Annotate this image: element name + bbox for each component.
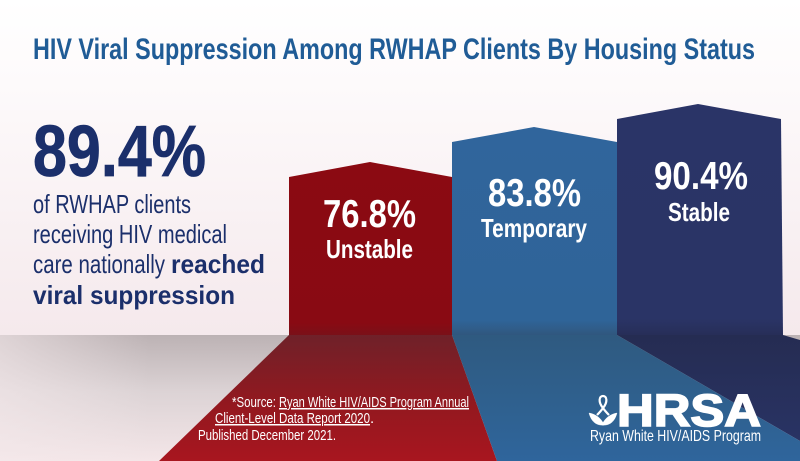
panel: unstable housing (159, 162, 497, 461)
source note: *Source: (232, 394, 276, 411)
description text (33, 189, 265, 310)
navy floor (617, 335, 800, 441)
red floor (159, 335, 497, 461)
floor (0, 335, 800, 461)
source note (198, 394, 469, 444)
blue floor (452, 335, 800, 461)
description text: care nationally (33, 249, 165, 279)
navy bar (617, 104, 783, 335)
description text: receiving HIV medical (33, 219, 227, 249)
blue bar (452, 127, 617, 335)
source note: Published December 2021. (198, 427, 336, 444)
temporary value: 83.8% (488, 172, 581, 215)
background (0, 0, 800, 335)
temporary label: Temporary (481, 213, 587, 243)
unstable value: 76.8% (323, 193, 416, 236)
source note: . (370, 410, 374, 427)
panel: stable housing (617, 104, 800, 441)
description text: viral suppression (33, 280, 235, 310)
HRSA wordmark: HRSA (617, 385, 761, 436)
stable label: Stable (668, 197, 730, 227)
source note: Client-Level Data Report 2020 (215, 410, 370, 427)
panel: temporary housing (452, 127, 800, 461)
description text: of RWHAP clients (33, 189, 191, 219)
description text: reached (171, 249, 265, 279)
HRSA logo (589, 385, 761, 445)
source note: Ryan White HIV/AIDS Program Annual (279, 394, 469, 411)
red bar (289, 162, 452, 335)
headline statistic: 89.4% (33, 112, 206, 192)
icon: ribbon with hands (589, 396, 617, 425)
unstable label: Unstable (326, 234, 413, 264)
stable value: 90.4% (654, 155, 748, 198)
